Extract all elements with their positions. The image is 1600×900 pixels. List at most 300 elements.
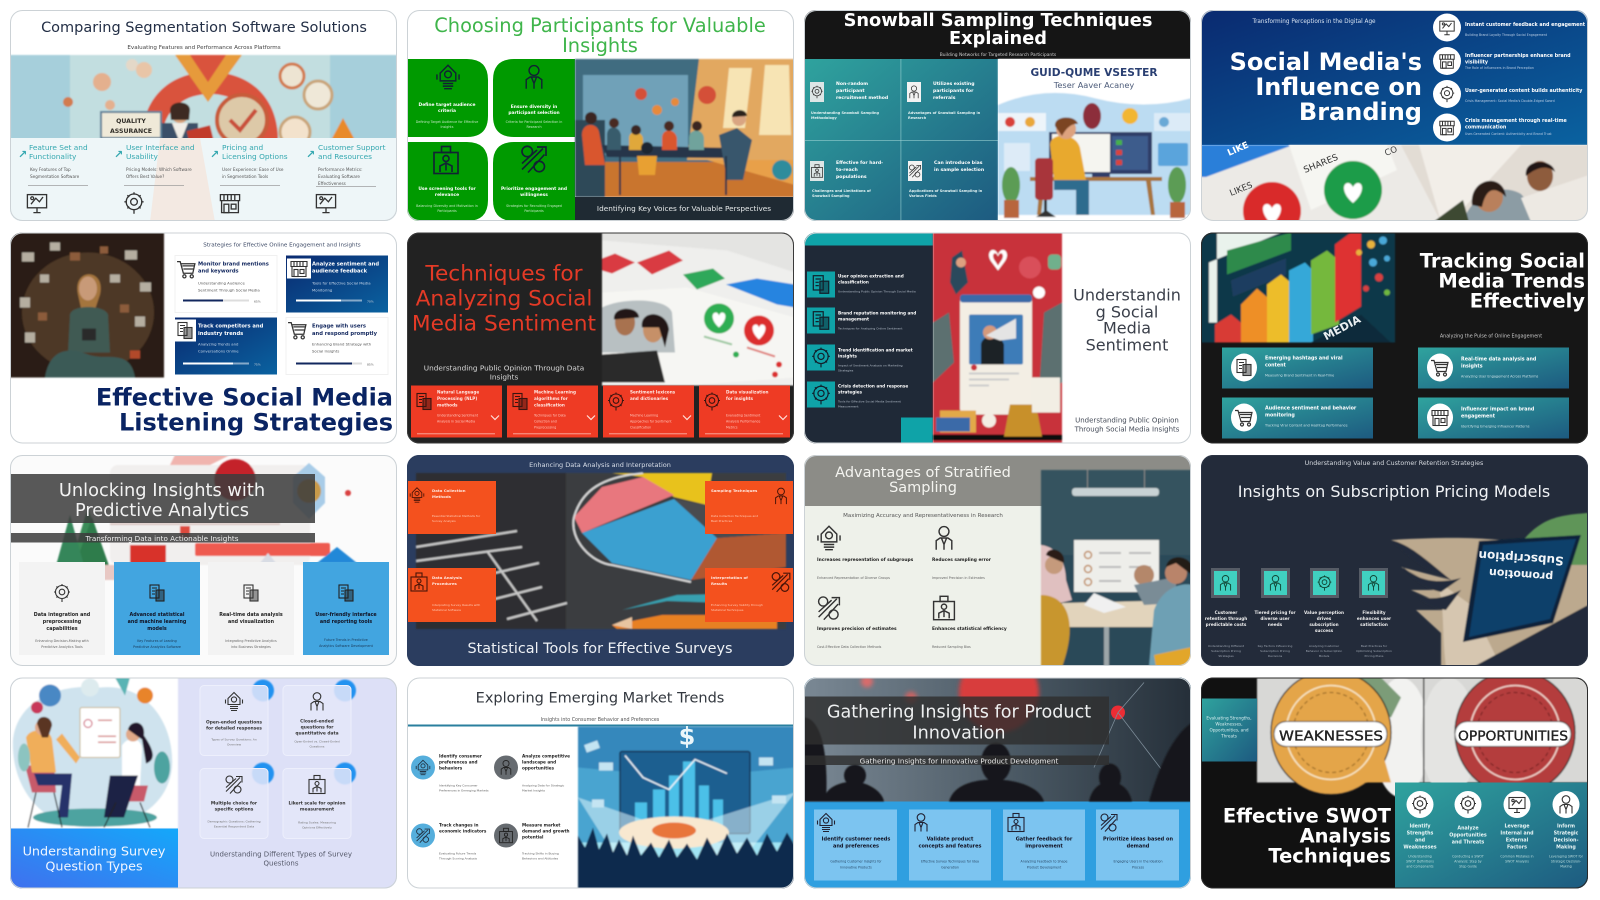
step: Flexibility: satisfaction [1360, 622, 1388, 627]
item: User opinion extraction: User opinion extraction and [838, 274, 904, 278]
card: Open-ended questions: Types of Survey Questions: An [210, 738, 257, 742]
item: Enhances statistical efficiency [932, 596, 1007, 649]
red block: Data visualization: Evaluating Sentiment [726, 414, 761, 418]
slide card: Comparing Segmentation Software Solutions: ASSURANCE [110, 128, 152, 135]
step: Tiered pricing: Tiered pricing for [1254, 610, 1296, 615]
title: Comparing Segmentation Software Solutions [41, 20, 367, 36]
subtitle: Insights [490, 372, 518, 382]
step: Customer retention: retention through [1205, 616, 1247, 621]
card: User-friendly interface: Analytics Software Development [319, 644, 374, 648]
item: Inform Strategic Decision-Making: Making [1556, 844, 1576, 850]
title: Question Types [45, 860, 143, 874]
item: Identify consumer preferences: Preferences in Emerging Markets [439, 788, 489, 792]
title: Understanding Survey [23, 844, 166, 860]
illustration: team meeting around a table [575, 59, 795, 197]
card: Identify customer needs: Gathering Customer Insights for [830, 860, 882, 864]
orange block: Data Analysis Procedures: Statistical Software [432, 608, 461, 612]
card: Track competitors and industry trends [175, 318, 277, 374]
card: Advanced statistical: Key Features of Leading [137, 639, 177, 643]
illustration subheading text: Teser Aaver Acaney [1053, 80, 1134, 90]
subtitle: Evaluating Features and Performance Across Platforms [127, 45, 281, 51]
overline: Understanding Value and Customer Retention Strategies [1305, 460, 1483, 467]
item: User-generated content: User-generated content builds authenticity [1465, 88, 1583, 94]
green block: Ensure diversity in participant selection [493, 59, 575, 137]
teal items panel [1395, 782, 1589, 890]
orange block: Interpretation of Results [705, 568, 794, 622]
card: Analyze sentiment and audience feedback: Analyze sentiment and [312, 262, 379, 268]
title: Insights on Subscription Pricing Models [1238, 482, 1550, 501]
column: Pricing and Licensing Options: ↗ [210, 148, 219, 161]
step: Customer retention: Customer [1215, 610, 1238, 615]
card: Track competitors and industry trends: 75% [254, 362, 261, 366]
illustration: quality assurance gears and badge [10, 55, 397, 222]
card: Prioritize ideas: Prioritize ideas based on [1103, 836, 1173, 842]
red block: NLP: Understanding Sentiment [437, 414, 479, 418]
subtitle band [10, 533, 315, 542]
item: Influencer partnerships: The Role of Influencers in Brand Perception [1464, 66, 1534, 70]
item: Increases representation [817, 526, 914, 580]
item: Influencer partnerships [1433, 47, 1571, 75]
green block: Use screening tools for relevance: relevance [435, 192, 459, 198]
card: Validate product concepts [909, 810, 991, 880]
card: Data integration: capabilities [46, 626, 78, 632]
card: Influencer impact: Influencer impact on brand [1461, 406, 1535, 412]
dollar sign: $ [679, 722, 695, 750]
orange block: Sampling Techniques: Data Collection Techniques and [711, 514, 758, 518]
illustration: developer at a desk [998, 59, 1192, 222]
card: Emerging hashtags: Emerging hashtags and viral [1265, 356, 1343, 362]
item: Crisis detection: Tools for Effective Social Media Sentiment [837, 400, 902, 404]
title: Social Media's [1230, 48, 1422, 76]
title: Advantages of Stratified [835, 465, 1011, 481]
card: Real-time data analysis: Analyzing User Engagement Across Platforms [1461, 374, 1539, 378]
card: Likert scale [283, 768, 351, 838]
card: Likert scale: Likert scale for opinion [288, 800, 346, 806]
card: Emerging hashtags [1222, 348, 1373, 388]
item: User-generated content [1433, 80, 1583, 108]
dark list panel [804, 232, 933, 444]
red block: Data visualization: Metrics [726, 426, 738, 430]
slide card: Unlocking Insights with Predictive Analytics [10, 455, 397, 666]
item: Utilizes existing participants for referrals: participants for [933, 88, 974, 94]
item: Track economic indicators: economic indicators [439, 828, 487, 834]
column: Feature Set and Functionality: Functionality [29, 152, 77, 161]
item: Enhances statistical efficiency: Reduced Sampling Bias [932, 645, 971, 649]
photo: chalk pie chart [416, 473, 786, 629]
step: Value perception: Behavior in Subscription [1306, 649, 1342, 653]
title: Influence on [1255, 73, 1422, 101]
title: Effective SWOT [1223, 804, 1392, 828]
item: Brand reputation monitoring: Brand reputation monitoring and [838, 310, 916, 316]
red block: Machine Learning: Collection and [534, 420, 557, 424]
column: User Interface and Usability: Usability [126, 152, 159, 161]
item: Can introduce bias in sample selection: Various Fields [909, 194, 937, 198]
orange block: Interpretation of Results: Results [711, 581, 728, 586]
illustration heading text: GUID-QUME VSESTER [1030, 67, 1158, 79]
step: Tiered pricing: needs [1268, 622, 1283, 627]
column: User Interface and Usability: Offers Best Value? [126, 174, 164, 179]
card: Track competitors and industry trends: Track competitors and [198, 324, 264, 330]
slide card: Effective SWOT Analysis Techniques [1201, 670, 1589, 890]
caption: Understanding Different Types of Survey [210, 850, 352, 858]
item: Improves precision: Improves precision of estimates [817, 626, 897, 632]
item: Brand reputation monitoring: management [838, 316, 869, 322]
item: Brand reputation monitoring: Techniques for Analyzing Online Sentiment [837, 326, 903, 330]
red block: Sentiment lexicons [603, 386, 694, 438]
red block: Sentiment lexicons: and dictionaries [630, 396, 669, 401]
column: User Interface and Usability: User Interface and [126, 143, 195, 152]
item: Leverage Internal and External Factors: Common Mistakes in [1500, 854, 1534, 858]
item: Trend identification [807, 344, 913, 372]
tablet headline [1478, 548, 1564, 583]
green block: Prioritize engagement and willingness: Strategies for Recruiting Engaged [506, 204, 562, 208]
column: Customer Support and Resources: Performance Metrics: [318, 167, 362, 172]
illustration: two people with a survey clipboard [10, 678, 178, 828]
item: Measure market demand: demand and growth [522, 828, 570, 834]
card: User-friendly interface: Future Trends in Predictive [324, 638, 368, 642]
title: Analysis [1300, 824, 1391, 848]
red block: Machine Learning: algorithms for [534, 396, 569, 401]
step: Customer retention [1205, 568, 1247, 658]
green block: Prioritize engagement and willingness: Prioritize engagement and [501, 186, 567, 192]
item: Analyze Opportunities and Threats: Analysis: Step by [1454, 860, 1482, 864]
title: Exploring Emerging Market Trends [476, 690, 724, 706]
item: User opinion extraction: Understanding Public Opinion Through Social Media [838, 290, 916, 294]
column: Feature Set and Functionality: ↗ [18, 148, 27, 161]
slide card: Understanding Social Media Sentiment [804, 232, 1191, 444]
title panel [804, 696, 1109, 744]
step: Customer retention: predictable costs [1206, 622, 1247, 627]
teal grid panel [804, 59, 998, 222]
card: Influencer impact [1418, 398, 1569, 438]
title: Effective Social Media [96, 384, 393, 412]
card: Validate product concepts: Effective Survey Techniques for Idea [921, 860, 979, 864]
item: Analyze competitive landscape: landscape and [522, 760, 556, 764]
card: Open-ended questions: Open-ended questions [206, 720, 262, 726]
item: Effective for hard-to-reach populations: populations [836, 174, 867, 180]
card: Data integration: Data integration and [34, 612, 91, 618]
photo: meeting room with whiteboard [1041, 470, 1192, 667]
green block: Prioritize engagement and willingness: Participants [524, 209, 544, 213]
card: Closed-ended questions: questions for [301, 724, 334, 730]
item: Analyze competitive landscape: Analyzing Data for Strategic [522, 784, 565, 788]
item: Reduces sampling error: Improved Precision in Estimates [932, 576, 985, 580]
card: Closed-ended questions: Questions [310, 744, 325, 748]
item: Utilizes existing participants for referrals: referrals [933, 95, 956, 101]
card: Analyze sentiment and audience feedback: 70% [367, 300, 374, 304]
orange block: Data Collection Methods: Methods [432, 494, 452, 499]
slide card: Insights on Subscription Pricing Models [1201, 455, 1588, 667]
item: Analyze Opportunities and Threats: Analyze [1457, 826, 1479, 832]
card: Monitor brand mentions and keywords [175, 256, 277, 312]
green block: Ensure diversity in participant selection: Ensure diversity in [511, 104, 557, 110]
item: Inform Strategic Decision-Making: Strategic [1554, 830, 1579, 836]
item: Analyze Opportunities and Threats: Step Guide [1459, 864, 1477, 868]
item: Crisis detection: strategies [838, 390, 862, 394]
item: Crisis management: communication [1465, 124, 1507, 130]
slide card: Understanding Survey Question Types [10, 678, 397, 890]
item: Identify consumer preferences: Identify consumer [439, 754, 483, 758]
teal top band [804, 232, 933, 246]
red block: Sentiment lexicons: Sentiment lexicons [630, 390, 676, 394]
card: Advanced statistical [114, 562, 200, 655]
red block: Machine Learning: Machine Learning [534, 390, 576, 394]
title: Tracking Social [1420, 250, 1585, 272]
item: Effective for hard-to-reach populations: to-reach [836, 167, 858, 173]
card: Validate product concepts: Validate product [927, 836, 974, 842]
slide card: Advantages of Stratified Sampling [804, 455, 1192, 667]
title: Media Sentiment [412, 312, 596, 336]
title: Understandin [1073, 286, 1181, 304]
subtitle: Insights into Consumer Behavior and Preferences [541, 717, 660, 723]
green block: Use screening tools for relevance: Use screening tools for [418, 186, 476, 192]
illustration: phone with man holding a megaphone [933, 232, 1062, 444]
green block: Define target audience criteria [407, 59, 488, 137]
photo: social media reactions board: SHARES [1302, 153, 1340, 176]
card: Multiple choice: Multiple choice for [211, 800, 258, 806]
title: Media [1103, 318, 1151, 338]
subtitle: Transforming Data into Actionable Insights [85, 534, 239, 543]
red block: Machine Learning: Preprocessing [534, 426, 556, 430]
item: Non-random participant recruitment method: recruitment method [836, 95, 888, 101]
item: Non-random participant recruitment method: Non-random [836, 81, 868, 87]
step: Value perception: Value perception [1304, 610, 1344, 615]
photo: social media reactions board: LIKE [1226, 141, 1251, 159]
item: Brand reputation monitoring [807, 308, 916, 334]
illustration: weaknesses and opportunities badges: OPPORTUNITIES [1458, 728, 1568, 744]
step: Flexibility: Pricing Plans [1364, 654, 1384, 658]
card: Prioritize ideas: Process [1132, 866, 1144, 870]
item: Influencer partnerships: visibility [1465, 60, 1489, 66]
photo: subscription tablet in torn paper shape [1391, 513, 1588, 667]
item: Trend identification: Trend identification and market [838, 348, 913, 352]
side panel text: Evaluating Strengths, [1206, 716, 1252, 720]
red block: NLP: Analysis in Social Media [437, 420, 475, 424]
card: Real-time data analysis: into Business Strategies [231, 645, 271, 649]
orange block: Data Collection Methods [407, 481, 496, 534]
navy header panel [1201, 10, 1588, 145]
green block: Use screening tools for relevance: Balancing Diversity and Motivation in [416, 204, 478, 208]
item: Leverage Internal and External Factors: Leverage [1505, 824, 1530, 830]
card: Identify customer needs [814, 810, 897, 880]
title: Statistical Tools for Effective Surveys [468, 641, 732, 657]
red block: Data visualization: for insights [726, 396, 754, 401]
item: Can introduce bias in sample selection: Can introduce bias [934, 160, 983, 166]
card: Identify customer needs: Innovative Products [840, 866, 872, 870]
card: Audience sentiment [1222, 398, 1373, 438]
item: User opinion extraction: classification [838, 280, 869, 284]
item: Identify Strengths and Weaknesses: and Components [1406, 864, 1434, 868]
background illustration: analytics, trees and snowflake [52, 455, 357, 580]
orange block: Sampling Techniques: Sampling Techniques [711, 488, 758, 493]
card: Open-ended questions [200, 686, 268, 756]
title: Media Trends [1438, 270, 1585, 292]
card: Identify customer needs: and preferences [833, 844, 879, 850]
item: Inform Strategic Decision-Making: Inform [1557, 824, 1575, 830]
item: Identify Strengths and Weaknesses [1403, 791, 1437, 868]
card: Emerging hashtags: Measuring Brand Sentiment in Real-Time [1265, 374, 1334, 378]
slide card: Snowball Sampling Techniques Explained [804, 10, 1192, 222]
column: Customer Support and Resources: Effectiveness [318, 181, 346, 186]
side panel text: Threats [1220, 734, 1237, 738]
card: Advanced statistical: Advanced statistical [130, 612, 185, 618]
item: Inform Strategic Decision-Making: Decision- [1554, 838, 1578, 844]
card: Validate product concepts: Generation [941, 866, 959, 870]
column: Pricing and Licensing Options: Pricing and [222, 143, 263, 152]
decorative blue circles [252, 680, 356, 784]
step: Value perception: Models [1319, 654, 1330, 658]
card: Engage with users and respond promptly: Enhancing Brand Strategy with [312, 342, 372, 346]
card: Prioritize ideas [1096, 810, 1179, 880]
title: Analyzing Social [416, 286, 592, 312]
card: User-friendly interface [303, 562, 389, 655]
item: Can introduce bias in sample selection: Applications of Snowball Sampling in [909, 189, 983, 193]
item: Measure market demand: potential [522, 834, 544, 840]
item: Effective for hard-to-reach populations [810, 160, 883, 198]
card: Validate product concepts: concepts and features [919, 844, 982, 850]
column: Customer Support and Resources [306, 143, 386, 213]
item: Track economic indicators: Evaluating Future Trends [439, 852, 477, 856]
orange block: Interpretation of Results: Enhancing Survey Validity through [711, 603, 763, 607]
card: Multiple choice: Demographic Questions: Gathering [207, 820, 261, 824]
item: Trend identification: Impact of Sentiment Analysis on Marketing [838, 364, 903, 368]
red block: Machine Learning: Techniques for Data [533, 414, 566, 418]
red block: Sentiment lexicons: Classification [630, 426, 651, 430]
card: Multiple choice [200, 768, 268, 838]
side panel text: Weaknesses, [1215, 722, 1243, 726]
card: Influencer impact: Identifying Emerging Influencer Patterns [1461, 424, 1530, 428]
card: Likert scale: measurement [300, 806, 334, 812]
red block: Data visualization: Data visualization [726, 390, 768, 394]
subtitle: Building Networks for Targeted Research Participants [940, 52, 1057, 58]
side panel text: Opportunities, and [1209, 728, 1249, 732]
orange block: Data Collection Methods: Data Collection [432, 488, 466, 493]
column: Pricing and Licensing Options: in Segmentation Tools [222, 174, 268, 179]
item: Utilizes existing participants for referrals: Research [908, 116, 927, 120]
card: Analyze sentiment and audience feedback: audience feedback [312, 268, 368, 274]
card: Engage with users and respond promptly: 85% [367, 362, 374, 366]
photo: social media reactions board: LIKES [1228, 181, 1254, 199]
card: Track competitors and industry trends: industry trends [198, 331, 243, 337]
card: Multiple choice: specific options [215, 806, 254, 812]
item: Analyze competitive landscape: Market Insights [522, 788, 545, 792]
green block: Prioritize engagement and willingness [493, 142, 575, 221]
red block: Sentiment lexicons: Approaches for Sentiment [630, 420, 672, 424]
green block: Ensure diversity in participant selection: Criteria for Participant Selection in [506, 120, 562, 124]
orange block: Interpretation of Results: Statistical Techniques [711, 608, 744, 612]
card: Advanced statistical: and machine learning [128, 619, 187, 625]
item: Identify Strengths and Weaknesses: Weaknesses [1403, 844, 1437, 850]
red block: NLP [411, 386, 502, 438]
subtitle: Strategies for Effective Online Engagement and Insights [203, 242, 361, 248]
red block: Machine Learning: classification [534, 402, 565, 408]
step: Customer retention: Subscription Pricing [1211, 649, 1241, 653]
slide card: Gathering Insights for Product Innovation [804, 652, 1192, 888]
item: Identify Strengths and Weaknesses: Identify [1409, 824, 1431, 830]
card: Influencer impact: engagement [1461, 414, 1496, 420]
item: Leverage Internal and External Factors: External [1506, 838, 1529, 844]
title: Branding [1299, 98, 1422, 126]
item: Crisis detection [807, 382, 908, 408]
card: Gather feedback [1003, 810, 1085, 880]
subtitle: Enhancing Data Analysis and Interpretation [529, 461, 671, 469]
caption: Questions [264, 860, 299, 868]
column: Feature Set and Functionality [18, 143, 88, 213]
item: Influencer partnerships: Influencer partnerships enhance brand [1465, 53, 1571, 59]
tablet headline: promotion [1489, 566, 1554, 583]
card: Analyze sentiment and audience feedback: Monitoring [312, 288, 333, 292]
title: Techniques for [424, 262, 583, 286]
item: User-generated content: Crisis Management: Social Media's Double-Edged Sword [1465, 99, 1555, 103]
item: Non-random participant recruitment method [810, 81, 888, 120]
photo: social media reactions board: CO [1383, 145, 1399, 159]
card: Monitor brand mentions and keywords: and keywords [198, 268, 239, 274]
item: Improves precision [817, 597, 897, 649]
step: Value perception: Analyzing Customer [1309, 644, 1340, 648]
card: Prioritize ideas: demand [1127, 844, 1150, 850]
red block: Data visualization: Analysis Performance [726, 420, 760, 424]
item: Can introduce bias in sample selection: in sample selection [934, 167, 984, 173]
card: Audience sentiment: Audience sentiment and behavior [1265, 406, 1357, 412]
orange block: Data Analysis Procedures: Data Analysis [432, 575, 463, 580]
photo: audience silhouettes facing a network display [804, 652, 1192, 802]
card: Engage with users and respond promptly: Social Insights [312, 348, 339, 354]
step: Value perception [1304, 568, 1344, 658]
title: Predictive Analytics [75, 500, 249, 521]
title: Sampling [889, 480, 957, 496]
card: User-friendly interface: and reporting tools [320, 619, 372, 625]
card: Gather feedback: Analyzing Feedback to Shape [1021, 860, 1067, 864]
card: Real-time data analysis: insights [1461, 364, 1483, 370]
slide card: Social Media's Influence on Branding [1201, 10, 1589, 240]
column: Feature Set and Functionality: Segmentation Software [30, 174, 80, 179]
step: Value perception: subscription [1309, 622, 1339, 627]
card: Likert scale: Rating Scales: Measuring [298, 820, 336, 824]
item: Analyze Opportunities and Threats [1449, 791, 1487, 868]
caption text: Identifying Key Voices for Valuable Perspectives [597, 204, 771, 213]
title: Choosing Participants for Valuable [434, 14, 766, 37]
slide card: Comparing Segmentation Software Solutions [10, 10, 397, 222]
illustration: weaknesses and opportunities badges: WEAKNESSES [1279, 728, 1383, 744]
column: Customer Support and Resources: Customer Support [318, 143, 386, 152]
column: User Interface and Usability [114, 143, 195, 214]
subtitle: Analyzing the Pulse of Online Engagement [1440, 334, 1542, 340]
title: Sentiment [1086, 336, 1168, 354]
item: User opinion extraction [807, 272, 916, 298]
orange block: Sampling Techniques: Best Practices [711, 519, 733, 523]
subtitle band [804, 756, 1109, 765]
step: Flexibility: Optimizing Subscription [1356, 649, 1392, 653]
item: Identify consumer preferences [411, 754, 489, 792]
card: Gather feedback: improvement [1025, 844, 1063, 850]
card: Monitor brand mentions and keywords: 65% [254, 300, 261, 304]
illustration: market surge with silhouettes [578, 726, 795, 890]
card: Monitor brand mentions and keywords: Sentiment Through Social Media [198, 288, 260, 292]
item: Instant customer feedback: Instant customer feedback and engagement [1465, 22, 1586, 28]
card: Prioritize ideas: Engaging Users in the Ideation [1113, 860, 1163, 864]
step: Tiered pricing: diverse user [1260, 616, 1291, 621]
item: Measure market demand [494, 822, 570, 860]
item: Utilizes existing participants for referrals: Advantages of Snowball Sampling in [908, 111, 981, 115]
subtitle: Through Social Media Insights [1074, 426, 1180, 434]
card: Engage with users and respond promptly: and respond promptly [312, 331, 378, 337]
step: Value perception: drives [1317, 616, 1332, 621]
step: Customer retention: Strategies [1218, 654, 1234, 658]
step: Value perception: success [1315, 628, 1334, 633]
item: Leverage Internal and External Factors [1500, 791, 1534, 864]
item: Measure market demand: Behaviors and Attitudes [522, 856, 558, 860]
item: Can introduce bias in sample selection [908, 160, 984, 198]
